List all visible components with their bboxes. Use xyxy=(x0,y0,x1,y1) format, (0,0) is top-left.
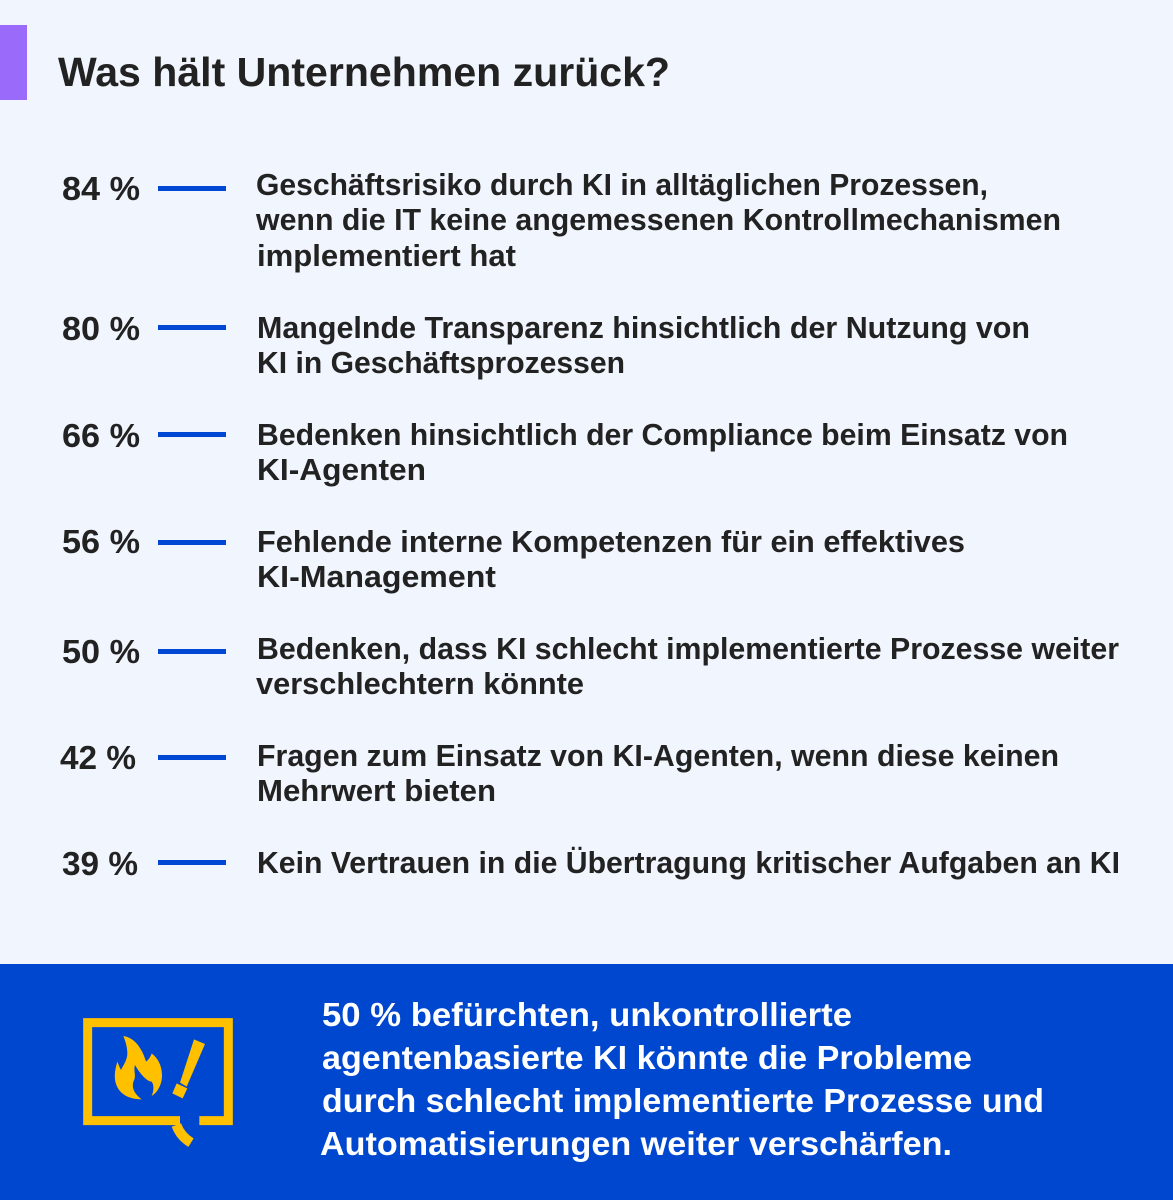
accent bar xyxy=(0,25,27,100)
item: 39 %: Kein Vertrauen in die Übertragung kritischer Aufgaben an KI xyxy=(257,845,1120,880)
callout text: agentenbasierte KI könnte die Probleme xyxy=(322,1039,972,1076)
callout text: durch schlecht implementierte Prozesse und xyxy=(322,1082,1044,1119)
item: 84 %: implementiert hat xyxy=(257,238,516,273)
item: 56 %: Fehlende interne Kompetenzen für ein effektives xyxy=(257,524,965,559)
item: 80 %: Mangelnde Transparenz hinsichtlich der Nutzung von xyxy=(257,310,1030,345)
item: 84 %: 84 % xyxy=(62,170,140,207)
item: 84 %: wenn die IT keine angemessenen Kontrollmechanismen xyxy=(255,202,1061,237)
item: 50 % xyxy=(62,631,1119,701)
item: 50 %: verschlechtern könnte xyxy=(256,666,584,701)
icon: speech bubble with flame and exclamation mark xyxy=(88,1023,228,1143)
item: 66 %: 66 % xyxy=(62,417,140,454)
item: 80 % xyxy=(62,310,1030,380)
item: 42 % xyxy=(60,738,1059,808)
item: 39 %: 39 % xyxy=(62,845,138,882)
callout text xyxy=(320,996,1044,1162)
item: 50 %: Bedenken, dass KI schlecht implementierte Prozesse weiter xyxy=(257,631,1119,666)
callout text: 50 % befürchten, unkontrollierte xyxy=(322,996,852,1033)
item: 42 %: 42 % xyxy=(60,739,136,776)
panel: callout band xyxy=(0,964,1173,1200)
item: 80 %: 80 % xyxy=(62,310,140,347)
item: 56 % xyxy=(62,523,965,594)
item: 84 %: Geschäftsrisiko durch KI in alltäglichen Prozessen, xyxy=(256,167,988,202)
item: 66 %: KI-Agenten xyxy=(257,452,426,487)
callout text: Automatisierungen weiter verschärfen. xyxy=(320,1125,952,1162)
item: 42 %: Mehrwert bieten xyxy=(257,773,496,808)
item: 56 %: KI-Management xyxy=(257,559,496,594)
title: Was hält Unternehmen zurück? xyxy=(58,49,670,95)
item: 50 %: 50 % xyxy=(62,633,140,670)
item: 84 % xyxy=(62,167,1061,273)
item: 66 % xyxy=(62,417,1068,487)
item: 66 %: Bedenken hinsichtlich der Compliance beim Einsatz von xyxy=(257,417,1068,452)
item: 42 %: Fragen zum Einsatz von KI-Agenten, wenn diese keinen xyxy=(257,738,1059,773)
item: 80 %: KI in Geschäftsprozessen xyxy=(257,345,625,380)
item: 56 %: 56 % xyxy=(62,523,140,560)
